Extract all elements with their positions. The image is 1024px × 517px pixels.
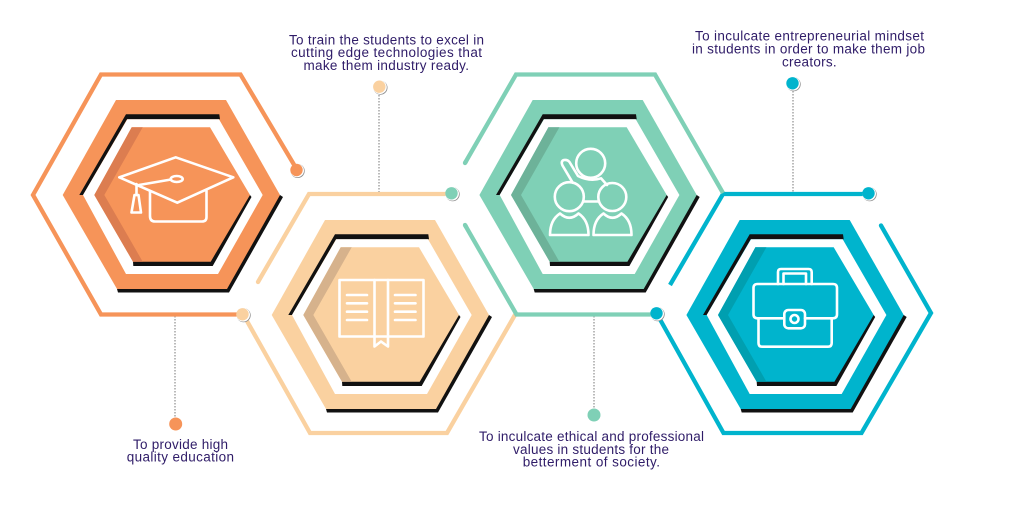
outer ring: teal (657, 194, 931, 433)
connector: teal dotted line (792, 88, 794, 192)
dot: teal text marker (786, 77, 801, 91)
hexagon: green people (479, 100, 700, 292)
dot: orange text marker (169, 418, 182, 430)
text: orange hexagon description: quality education (127, 450, 234, 465)
text: peach hexagon description: make them industry ready. (304, 58, 469, 73)
outer ring: peach (243, 194, 516, 433)
text: teal hexagon description: To inculcate entrepreneurial mindset (695, 29, 924, 44)
icon: briefcase (754, 269, 837, 347)
dot: green on peach ring (445, 187, 460, 201)
dot: teal on green ring (650, 307, 665, 321)
connector: peach dotted line (378, 92, 380, 192)
outer ring: green (465, 74, 723, 314)
icon: people group (550, 149, 632, 235)
dot: teal ring end (862, 187, 877, 201)
connector: green dotted line (593, 316, 595, 409)
text: peach hexagon description: cutting edge technologies that (291, 45, 482, 60)
text: green hexagon description: values in students for the (513, 442, 669, 457)
text: green hexagon description: To inculcate ethical and professional (479, 429, 704, 444)
hexagon: peach book (272, 220, 492, 412)
dot: green text marker (588, 408, 600, 422)
icon: open book (340, 280, 424, 346)
hexagon: teal briefcase (686, 220, 907, 412)
text: teal hexagon description: in students in order to make them job (692, 41, 925, 56)
icon: graduation cap (119, 157, 233, 222)
dot: peach text marker (373, 80, 388, 95)
connector: orange dotted line (174, 316, 176, 418)
text: green hexagon description: betterment of society. (523, 455, 660, 470)
text: teal hexagon description: creators. (782, 55, 837, 70)
dot: orange ring end (290, 164, 305, 178)
outer ring: orange (33, 74, 296, 314)
text: orange hexagon description: To provide high (133, 437, 228, 452)
text: peach hexagon description: To train the students to excel in (289, 32, 484, 47)
dot: peach ring end (236, 308, 251, 322)
hexagon: orange education (63, 100, 283, 292)
